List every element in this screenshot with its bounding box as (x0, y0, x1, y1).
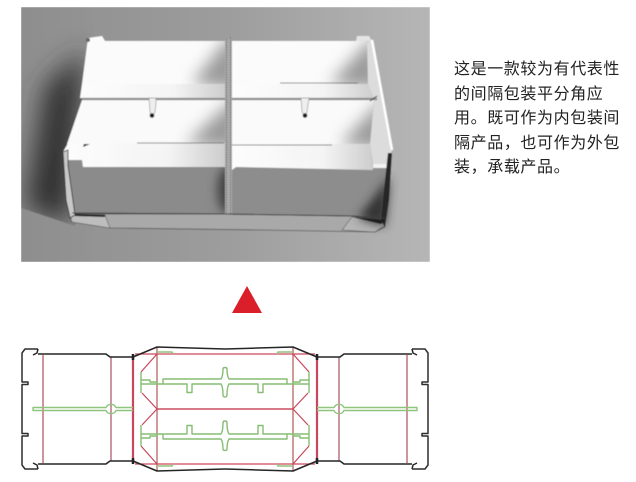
shelf crease lines (137, 83, 358, 145)
front panel left (68, 160, 225, 214)
right black slit (352, 217, 385, 224)
right back wall shadow (326, 40, 368, 84)
description text: 的间隔包装平分角应 (454, 86, 603, 102)
right front wall shadow (336, 100, 374, 144)
dieline bottom-right quarter (225, 409, 428, 471)
description text: 用。既可作为内包装间 (454, 104, 620, 128)
right front wall (232, 100, 374, 145)
flap left piece (70, 215, 110, 228)
photo: cardboard partition box (21, 7, 430, 262)
right side wall (367, 40, 392, 165)
box shadow (25, 50, 85, 225)
right outer corner (381, 153, 392, 227)
horizontal divider (82, 98, 377, 100)
description text: 这是一款较为有代表性 (454, 61, 620, 78)
right outer white edge (372, 40, 392, 150)
photo background (21, 7, 430, 262)
bottom flap (70, 214, 385, 232)
dieline diagram (22, 347, 428, 471)
box bottom shadow line (72, 213, 385, 218)
description text: 隔产品，也可作为外包 (454, 128, 620, 152)
small slit (83, 144, 90, 147)
left outer corner (63, 150, 75, 218)
left front floor (63, 143, 225, 167)
front panel right (232, 167, 388, 218)
right top tab (356, 36, 372, 41)
left black slit (75, 215, 105, 216)
red triangle arrow (232, 286, 262, 313)
right corner shading (358, 176, 390, 226)
left back wall shadow (188, 40, 226, 84)
right back wall (232, 41, 368, 84)
right back floor (232, 84, 374, 98)
top left corner mark (86, 38, 90, 42)
description text (454, 60, 620, 177)
dieline bottom-left quarter (22, 409, 225, 471)
dieline top-left quarter (22, 347, 225, 409)
left back floor (80, 84, 225, 98)
flap right piece (342, 217, 385, 232)
left front wall (67, 100, 225, 144)
right corner ledge (373, 164, 388, 168)
main graphic (21, 7, 430, 472)
dieline top-right quarter (225, 347, 428, 409)
left back wall (82, 36, 225, 84)
central vertical divider (225, 39, 232, 215)
right front floor (232, 144, 373, 170)
left front wall shadow (182, 100, 226, 144)
front panel shadow (212, 167, 226, 214)
notch left (149, 98, 156, 115)
description text: 装，承载产品。 (454, 153, 570, 177)
notch right (301, 98, 309, 115)
